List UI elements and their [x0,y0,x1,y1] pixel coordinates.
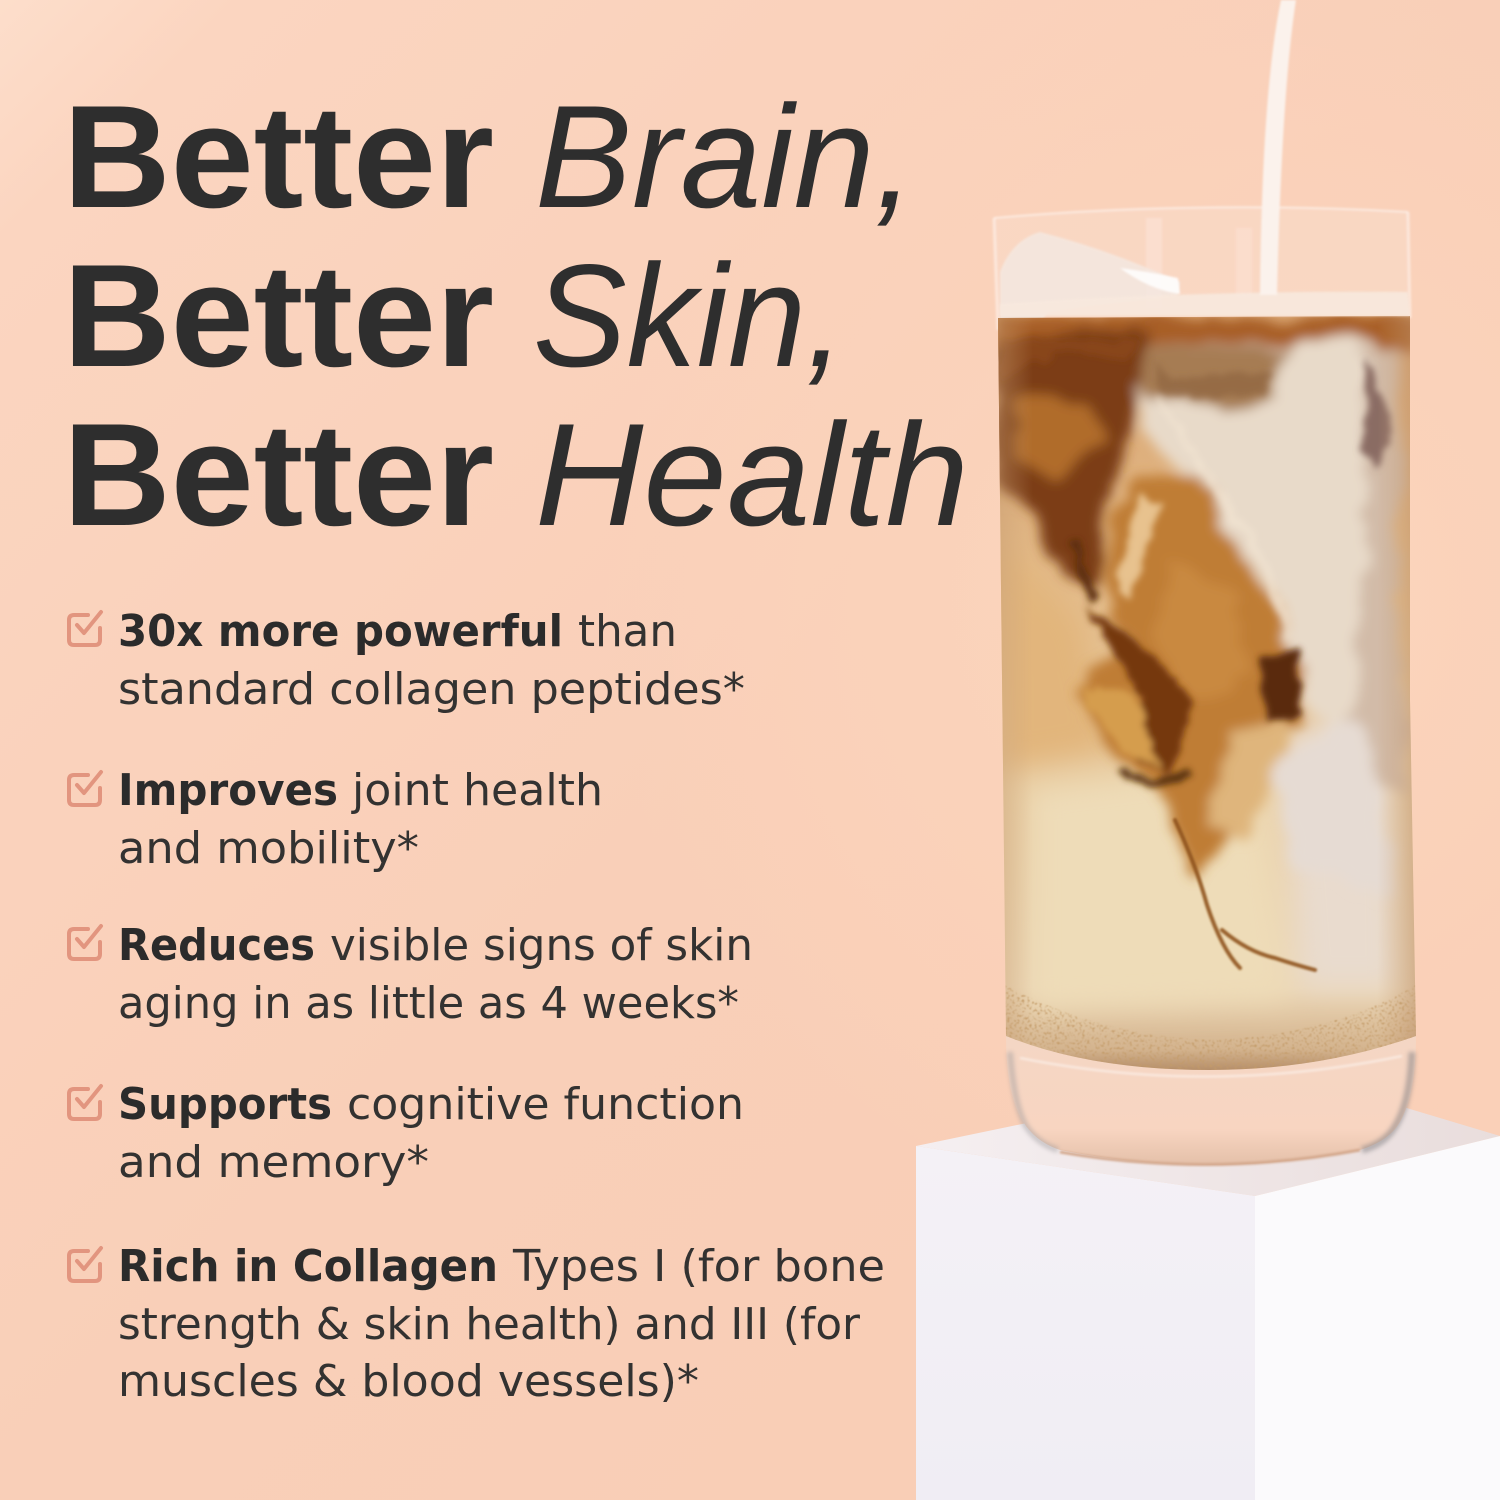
benefit: cognitive function: cognitive function [347,1079,744,1130]
benefits list [69,606,885,1407]
title: Brain, [535,75,915,238]
icon: checkbox [69,1086,101,1119]
benefit: joint health: Improves [118,765,338,816]
sediment grain [1006,986,1416,1070]
benefit: 30x more powerful: 30x more powerful [118,606,563,657]
glass rim and empty upper section [994,207,1410,330]
benefit: cognitive function [69,1079,744,1188]
benefit: cognitive function: Supports [118,1079,332,1130]
icon: checkbox [69,926,101,959]
side shading [990,310,1420,1080]
swirl tail [1175,820,1315,970]
milk stream [1260,0,1296,295]
benefit: 30x more powerful: standard collagen peptides* [118,664,745,715]
glass of iced coffee [990,0,1420,1165]
dark coffee and marbling [990,316,1420,900]
benefit: cognitive function: and memory* [118,1137,429,1188]
benefit: skin aging: Reduces [118,920,315,971]
benefit: skin aging: visible signs of skin [330,920,753,971]
fine swirl details [1000,340,1392,781]
benefit: joint health: joint health [351,765,603,816]
icon: checkbox [69,1248,101,1281]
benefit: skin aging: aging in as little as 4 weeks* [118,978,739,1029]
milk surface foam [1000,292,1410,316]
glass base [1006,1036,1416,1165]
title: Skin, [533,234,845,397]
ice cube highlight [1120,268,1180,294]
benefit: collagen types: strength & skin health) and III (for [118,1299,861,1350]
title: Better [63,75,494,238]
ice cube [1000,232,1180,360]
title: Health [535,393,969,556]
benefit: collagen types: Types I (for bone [512,1241,885,1292]
icon: checkbox [69,612,101,645]
title [63,75,969,556]
benefit: collagen types: Rich in Collagen [118,1241,498,1292]
benefit: collagen types: muscles & blood vessels)* [118,1356,699,1407]
soft milk haze [1000,540,1400,1010]
benefit: 30x more powerful [69,606,745,715]
coffee and milk swirl [990,310,1420,1080]
icon: checkbox [69,772,101,805]
benefit: collagen types [69,1241,885,1407]
white plinth [916,1106,1500,1500]
title: Better [63,234,494,397]
benefit: joint health [69,765,603,874]
benefit: joint health: and mobility* [118,823,419,874]
benefit: skin aging [69,920,753,1029]
title: Better [63,393,494,556]
benefit: 30x more powerful: than [578,606,677,657]
